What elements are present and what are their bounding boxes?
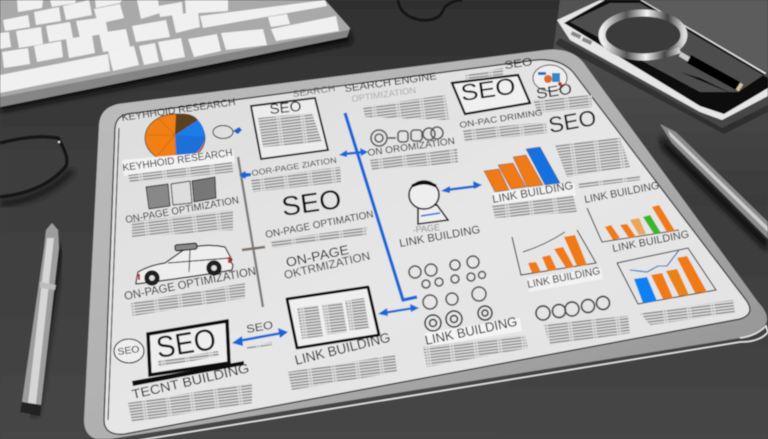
bar chart: right top bbox=[587, 205, 679, 242]
heading: on-page training: ON-PAC DRIMING bbox=[459, 107, 543, 130]
magnifier shadow bbox=[640, 60, 735, 95]
heading: on-page optimization centre: ON-PAGE OPTIMATION bbox=[264, 209, 375, 241]
monitor with SEO: SEO bbox=[459, 73, 517, 106]
text block: right paragraph bbox=[555, 137, 630, 177]
text block: link building rings bbox=[423, 335, 528, 367]
search headings: OPTIMIZATION bbox=[351, 85, 417, 104]
heading: link building centre chart: LINK BUILDING bbox=[526, 265, 601, 291]
heading: on-page optimization left: ON-PAGE OPTIMIZATION bbox=[125, 195, 240, 226]
icon: car bbox=[136, 243, 233, 285]
heading: link building bars: LINK BUILDING bbox=[491, 180, 574, 206]
heading: tecnt building: TECNT BUILDING bbox=[130, 360, 251, 402]
pie chart bbox=[145, 114, 205, 162]
text block: ring row bbox=[543, 316, 630, 345]
SEO small label and blue arrow: SEO bbox=[245, 319, 275, 336]
paper sheet bbox=[104, 60, 750, 434]
search headings: SEARCH bbox=[292, 83, 336, 99]
keyboard bbox=[0, 0, 352, 112]
text block: on-page summary bbox=[370, 148, 458, 170]
phone with magnifying glass bbox=[555, 0, 768, 134]
text block: left bbox=[132, 210, 233, 237]
heading: link building rings: LINK BUILDING bbox=[424, 314, 519, 348]
icons: on-page circles bbox=[371, 127, 443, 146]
SEO label top: SEO bbox=[504, 56, 534, 72]
text block: tablet bbox=[288, 355, 397, 390]
grey vertical connector bbox=[238, 157, 265, 307]
icons: ring cluster bbox=[409, 256, 492, 331]
document card with SEO: SEO bbox=[269, 98, 302, 117]
text block: tecnt building bbox=[128, 383, 252, 422]
document card with SEO bbox=[251, 98, 328, 159]
text block: below SEO label bbox=[533, 95, 592, 113]
text block: bottom right bbox=[640, 300, 735, 325]
desk right side shading bbox=[500, 0, 768, 439]
SEO label right: SEO bbox=[535, 81, 573, 103]
bar chart: link building bbox=[484, 147, 560, 192]
icon: badge bbox=[533, 65, 567, 91]
SEO circle badge: SEO bbox=[117, 344, 140, 358]
heading: on-page optimization middle: ON OROMIZATION bbox=[367, 136, 456, 159]
magnifier handle bbox=[680, 54, 690, 60]
glasses at top bbox=[398, 0, 462, 20]
heading: on-page optimization lower: ON-PAGE bbox=[285, 242, 351, 270]
blue arrow head bbox=[239, 171, 251, 179]
heading: link building tablet: LINK BUILDING bbox=[293, 330, 392, 368]
blue double arrow: tablet to rings bbox=[378, 304, 419, 316]
heading: on-page link building: -PAGE bbox=[412, 222, 440, 235]
icon: three documents bbox=[146, 177, 216, 209]
laptop with SEO bbox=[132, 321, 244, 386]
blue vertical connector bbox=[345, 113, 417, 300]
heading: keyword research second: KEYHHOID RESEARCH bbox=[122, 148, 233, 174]
text block: car bbox=[130, 283, 245, 316]
tablet bbox=[287, 287, 379, 348]
search headings: SEARCH ENGINE bbox=[344, 71, 438, 95]
SEO label top bbox=[465, 56, 534, 80]
glasses at left bbox=[0, 137, 72, 204]
heading: link building chart: LINK BUILDING bbox=[611, 228, 690, 255]
heading: keyword research: KEYHHOID RESEARCH bbox=[121, 97, 236, 124]
bar chart: right bottom bbox=[617, 248, 716, 304]
pen right bbox=[660, 124, 768, 252]
SEO small label and blue arrow bbox=[232, 319, 288, 349]
SEO centre heading: SEO bbox=[280, 184, 343, 222]
pen left bbox=[20, 223, 59, 416]
heading: link building right: LINK BUILDING bbox=[583, 180, 660, 206]
text block: centre lower bbox=[270, 227, 367, 248]
heading: on-page link building: LINK BUILDING bbox=[398, 224, 481, 250]
SEO large right: SEO bbox=[547, 105, 598, 138]
icon: small oval with arrow bbox=[213, 126, 242, 138]
laptop with SEO: SEO bbox=[154, 323, 218, 365]
icons: ring row bbox=[536, 296, 610, 320]
heading: on-page optimization car: ON-PAGE OPTIMIZATION bbox=[123, 266, 257, 303]
monitor with SEO bbox=[452, 73, 530, 114]
text block: centre bbox=[251, 167, 341, 192]
text block: link building bars bbox=[492, 195, 577, 218]
SEO circle badge bbox=[114, 339, 144, 363]
search headings bbox=[292, 71, 450, 120]
mat board bbox=[84, 50, 768, 439]
bar chart: centre bbox=[512, 230, 596, 275]
text block: right short bbox=[578, 176, 640, 188]
heading: on-page optimization lower: OKTRMIZATION bbox=[283, 250, 371, 282]
blue arrow: document to on-page bbox=[339, 148, 368, 157]
blue double arrow: head to bars bbox=[441, 181, 482, 193]
text block: on-page training bbox=[463, 122, 547, 142]
heading: on-page centre: OOR-PAGE ZIATION bbox=[251, 156, 337, 178]
magnifier ring bbox=[602, 13, 684, 57]
icon: head bbox=[409, 181, 448, 224]
